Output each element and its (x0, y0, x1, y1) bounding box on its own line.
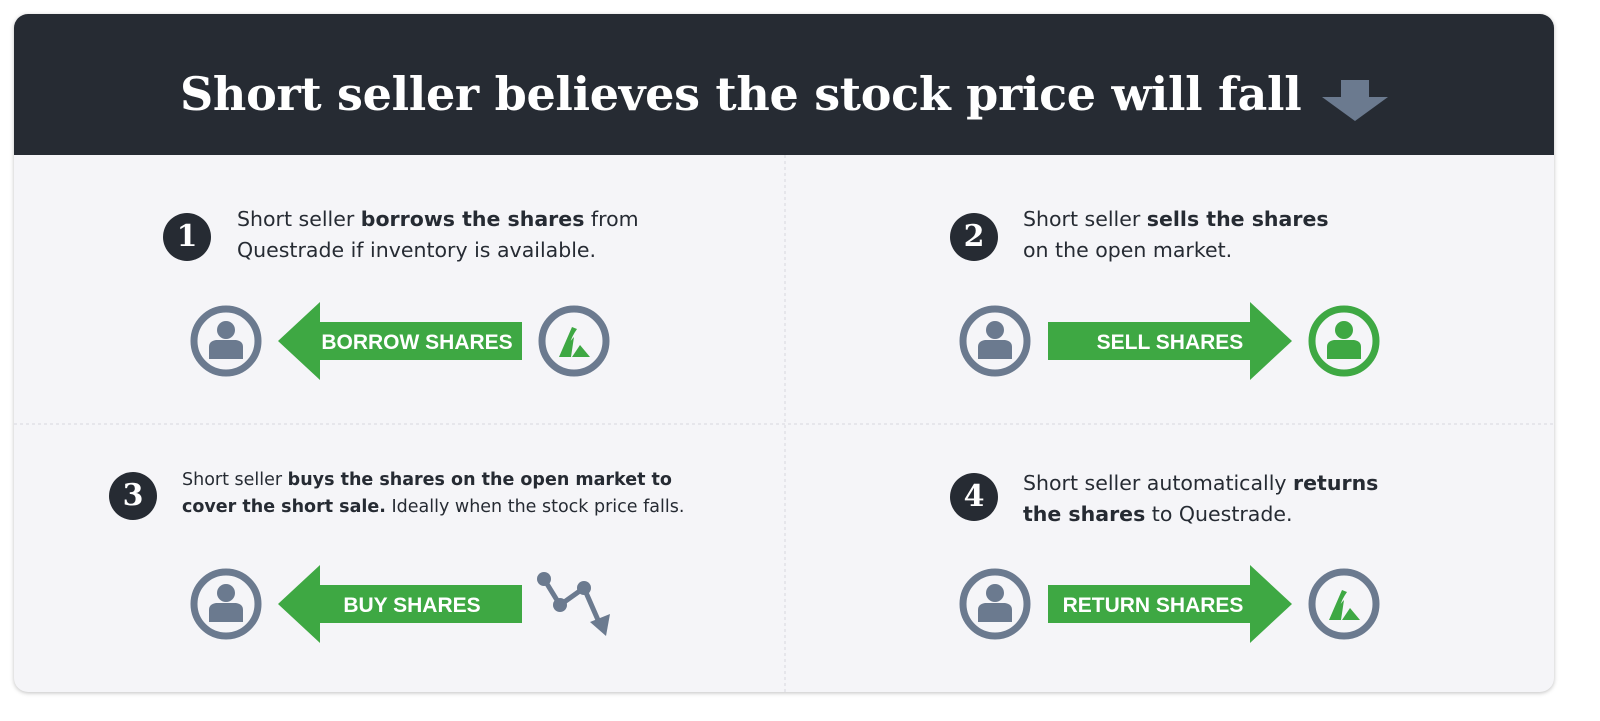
text: step 1 (237, 207, 639, 262)
number 4: 4 (964, 479, 984, 514)
text: step 2: on the open market. (1023, 238, 1232, 262)
arrow: sell shares (1048, 302, 1292, 380)
number 1: 1 (177, 219, 197, 254)
icon: questrade (1312, 572, 1376, 636)
text: step 3: cover the short sale. Ideally when the stock price falls. (182, 497, 684, 517)
arrow: sell shares: SELL SHARES (1097, 331, 1243, 354)
arrow: return shares (1048, 565, 1292, 643)
text: step 2: Short seller sells the shares (1023, 207, 1329, 231)
text: step 3: Short seller buys the shares on the open market to (182, 470, 672, 490)
number 3 (109, 472, 157, 520)
arrow: buy shares: BUY SHARES (343, 594, 481, 617)
icon: person (194, 572, 258, 636)
icon: person (194, 309, 258, 373)
icon: questrade (542, 309, 606, 373)
text: step 4: the shares to Questrade. (1023, 502, 1292, 526)
number 2: 2 (964, 219, 984, 254)
arrow: borrow shares: BORROW SHARES (321, 331, 513, 354)
text: step 1: Questrade if inventory is available. (237, 238, 596, 262)
icon: down arrow (1322, 80, 1388, 121)
step 1 (194, 302, 606, 380)
text: step 1: Short seller borrows the shares from (237, 207, 639, 231)
number 1 (163, 213, 211, 261)
header bar (14, 14, 1554, 155)
icon: falling chart (537, 572, 610, 636)
icon: person (963, 572, 1027, 636)
arrow: return shares: RETURN SHARES (1063, 594, 1243, 617)
icon: person (963, 309, 1027, 373)
text: step 4 (1023, 471, 1378, 526)
arrow: borrow shares (278, 302, 522, 380)
step 2 (963, 302, 1376, 380)
title: Short seller believes the stock price will fall (180, 67, 1301, 121)
number 2 (950, 213, 998, 261)
text: step 2 (1023, 207, 1329, 262)
text: step 4: Short seller automatically returns (1023, 471, 1378, 495)
number 3: 3 (123, 478, 143, 513)
arrow: buy shares (278, 565, 522, 643)
text: step 3 (182, 470, 684, 517)
icon: buyer green (1312, 309, 1376, 373)
step 4 (963, 565, 1376, 643)
step 3 (194, 565, 610, 643)
number 4 (950, 473, 998, 521)
